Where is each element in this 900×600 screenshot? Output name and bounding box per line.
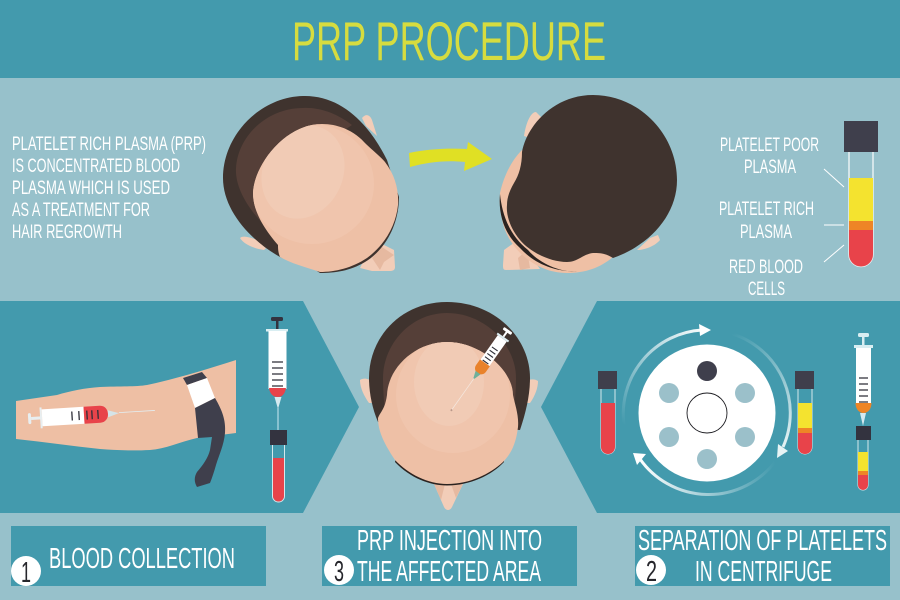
- head: before treatment (balding): [223, 96, 399, 273]
- label: platelet poor plasma: PLATELET POOR: [720, 135, 819, 156]
- step number 1: 1: [21, 557, 31, 589]
- step number 3: [324, 555, 354, 588]
- arrow: before to after: [409, 142, 492, 171]
- label box: step 3: THE AFFECTED AREA: [357, 556, 541, 588]
- label box: step 1: [11, 526, 266, 589]
- tourniquet: [183, 372, 225, 487]
- leader lines: [824, 169, 844, 262]
- panel: blood collection: [0, 301, 359, 513]
- step number 3: 3: [334, 556, 344, 588]
- step number 2: 2: [646, 556, 657, 588]
- arm: [16, 360, 236, 450]
- label: red blood cells: RED BLOOD: [729, 257, 803, 278]
- intro text block: PLATELET RICH PLASMA (PRP): [12, 134, 206, 155]
- label: red blood cells: CELLS: [748, 279, 785, 300]
- syringe injecting scalp: [445, 326, 514, 415]
- tube diagram: [844, 121, 878, 266]
- label: platelet poor plasma: [720, 135, 819, 178]
- intro text block: HAIR REGROWTH: [12, 222, 122, 243]
- syringe in arm: [27, 400, 156, 429]
- head: after treatment (regrown hair): [500, 95, 677, 273]
- intro text block: PLASMA WHICH IS USED: [12, 178, 170, 199]
- syringe over tube: [266, 317, 288, 502]
- label box: step 1: BLOOD COLLECTION: [49, 543, 235, 575]
- step number 1: [11, 556, 41, 589]
- centrifuge disc: [638, 344, 776, 482]
- label: platelet poor plasma: PLASMA: [744, 157, 796, 178]
- label: platelet rich plasma: [719, 199, 814, 243]
- title: PRP PROCEDURE: [292, 10, 606, 72]
- label box: step 3: PRP INJECTION INTO: [357, 525, 542, 557]
- label box: step 3: [322, 525, 577, 588]
- tube legend: [719, 121, 878, 300]
- panel: centrifuge separation: [541, 301, 900, 513]
- intro text block: AS A TREATMENT FOR: [12, 200, 150, 221]
- head: injection: [360, 302, 538, 510]
- tube: whole blood: [598, 371, 617, 454]
- label: red blood cells: [729, 257, 803, 300]
- label: platelet rich plasma: PLATELET RICH: [719, 199, 814, 220]
- label: platelet rich plasma: PLASMA: [740, 222, 792, 243]
- step number 2: [636, 555, 666, 588]
- intro text block: IS CONCENTRATED BLOOD: [12, 156, 180, 177]
- syringe over separated tube: [854, 333, 873, 490]
- tube: separated blood: [795, 371, 814, 454]
- intro text block: [12, 134, 206, 243]
- header band: [0, 0, 900, 78]
- label box: step 2: [635, 525, 890, 588]
- rotation arrows: [623, 324, 790, 495]
